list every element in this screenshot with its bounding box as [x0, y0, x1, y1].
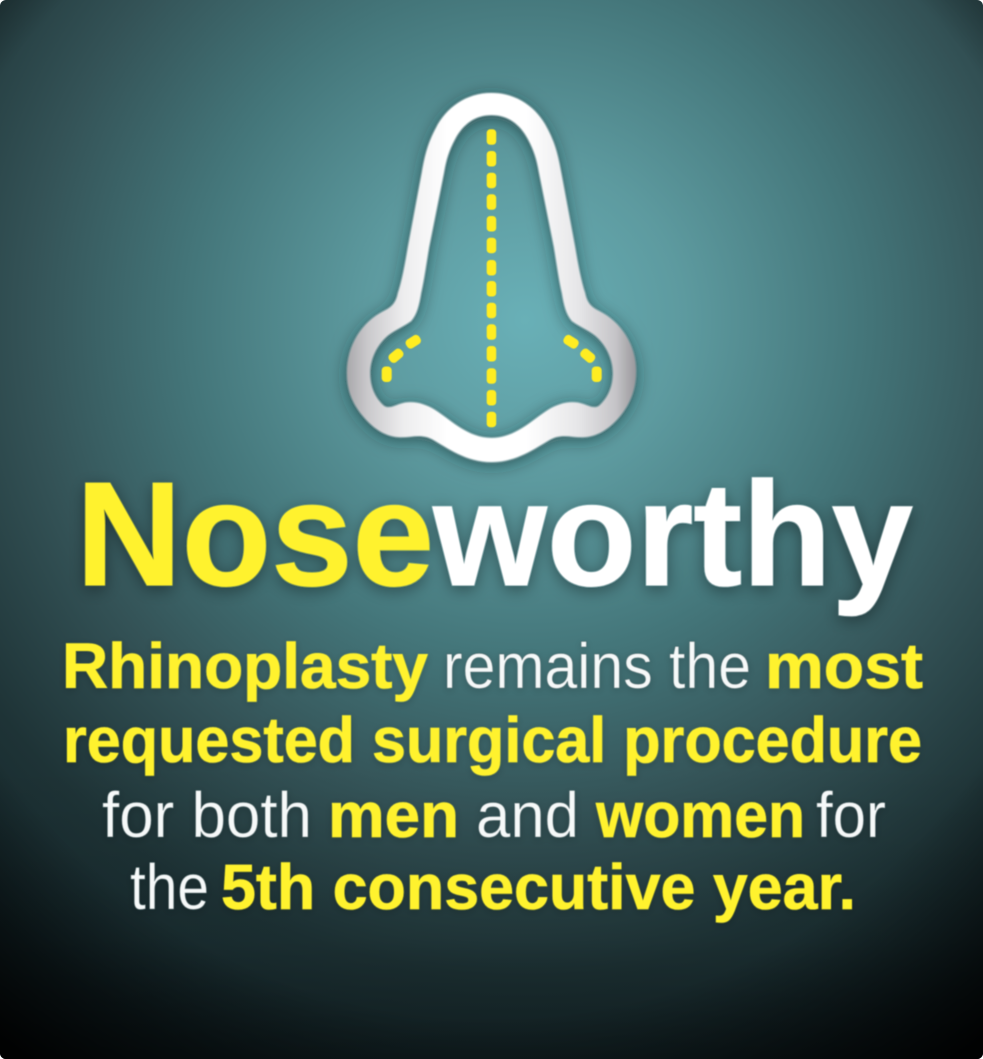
icon: nose outline with incision lines	[347, 93, 636, 462]
body text	[62, 630, 923, 923]
centre dashed line	[487, 129, 496, 427]
line 3: for both	[102, 779, 312, 851]
right nostril dashes	[562, 333, 602, 382]
line 3	[102, 779, 886, 851]
line 1: most	[765, 630, 923, 702]
left nostril dashes	[382, 333, 422, 382]
nose outline	[347, 93, 636, 462]
line 4: the	[130, 851, 209, 923]
title: Noseworthy	[76, 452, 913, 617]
title: Noseworthy: Nose	[76, 452, 434, 617]
line 3: and	[476, 779, 579, 851]
line 3: women	[595, 779, 805, 851]
line 1: remains the	[443, 630, 751, 702]
line 2: requested surgical procedure	[63, 704, 922, 776]
line 4: 5th consecutive year.	[221, 851, 856, 923]
line 3: for	[816, 779, 886, 851]
line 3: men	[328, 779, 459, 851]
line 1: Rhinoplasty	[62, 630, 428, 702]
line 1	[62, 630, 923, 702]
title: Noseworthy: worthy	[432, 452, 913, 617]
